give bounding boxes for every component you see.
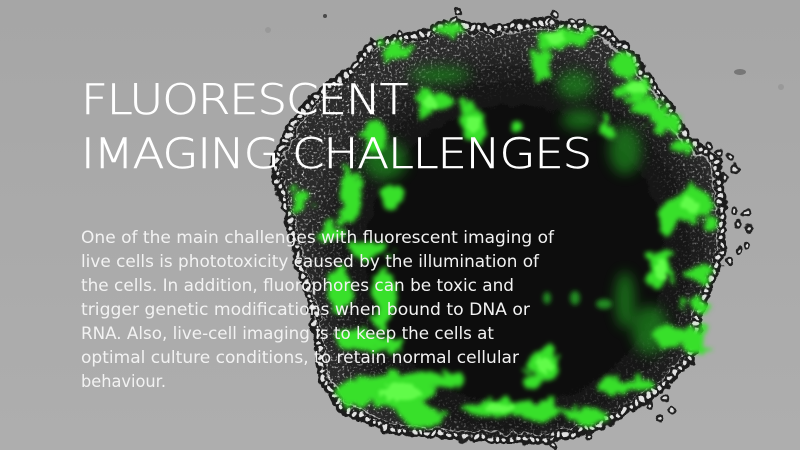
body paragraph: the cells. In addition, fluorophores can be toxic and [81, 276, 514, 295]
background debris specks [265, 14, 784, 90]
title: IMAGING CHALLENGES [81, 129, 591, 178]
green fluorescent dim inner patches [363, 67, 668, 354]
body paragraph: One of the main challenges with fluorescent imaging of [81, 228, 555, 247]
green fluorescent hot spots [380, 32, 699, 412]
body paragraph: RNA. Also, live-cell imaging is to keep the cells at [81, 324, 495, 343]
dark spheroid body [280, 28, 716, 434]
body paragraph: behaviour. [81, 372, 166, 391]
body paragraph: trigger genetic modifications when bound to DNA or [81, 300, 530, 319]
body paragraph: optimal culture conditions, to retain normal cellular [81, 348, 519, 367]
title [81, 75, 591, 178]
isolated dim dots in core [543, 291, 612, 309]
cell spheroid [260, 0, 760, 450]
green fluorescent bright clusters [288, 23, 719, 428]
body paragraph [81, 228, 555, 391]
title: FLUORESCENT [81, 75, 407, 124]
beaded cell edge [274, 9, 751, 448]
speckled rim texture [275, 22, 722, 440]
body paragraph: live cells is phototoxicity caused by the illumination of [81, 252, 540, 271]
